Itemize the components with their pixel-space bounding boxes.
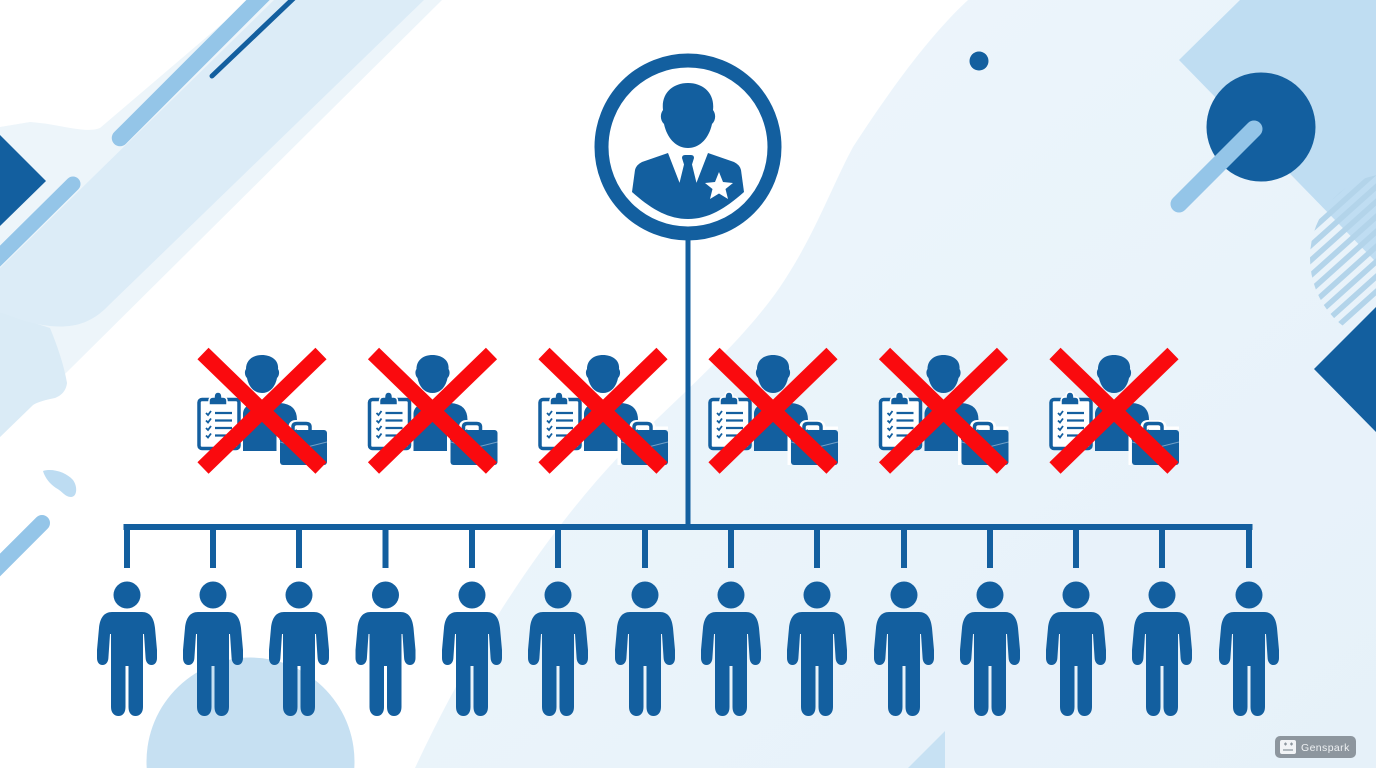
employee 9 bbox=[787, 582, 847, 716]
employee 2 bbox=[183, 582, 243, 716]
connector: horizontal bracket with drops bbox=[124, 524, 1252, 568]
employee 4 bbox=[356, 582, 416, 716]
decoration: lower soft blob left bbox=[0, 312, 67, 437]
decoration: bottom left circle bbox=[146, 658, 354, 768]
crossed-out manager 2 bbox=[370, 354, 498, 468]
decoration: striped circle bbox=[1310, 176, 1376, 326]
employee 12 bbox=[1046, 582, 1106, 716]
decoration: dark diamond right bbox=[1314, 307, 1376, 432]
decoration: bottom left stroke bbox=[0, 523, 42, 575]
decoration: bottom left small blob bbox=[43, 470, 76, 497]
leader star bbox=[705, 172, 733, 199]
watermark: Genspark bbox=[1275, 736, 1356, 758]
employee 5 bbox=[442, 582, 502, 716]
decoration: strokes top left bbox=[0, 0, 296, 268]
background blob: right bbox=[415, 0, 1376, 768]
decoration: dot bbox=[970, 52, 988, 70]
decoration: small triangle bottom bbox=[908, 731, 945, 768]
icon: leader in circle bbox=[602, 60, 774, 234]
employee 7 bbox=[615, 582, 675, 716]
employee 1 bbox=[97, 582, 157, 716]
leader shirt bbox=[668, 153, 708, 184]
leader tie bbox=[679, 155, 697, 185]
employee 11 bbox=[960, 582, 1020, 716]
crossed-out manager 3 bbox=[540, 354, 668, 468]
connector: vertical line from leader bbox=[686, 238, 690, 526]
crossed-out manager 5 bbox=[880, 354, 1008, 468]
watermark label: Genspark bbox=[1301, 742, 1350, 754]
crossed-out manager 4 bbox=[710, 354, 838, 468]
decoration: dark circle top right bbox=[1206, 72, 1316, 182]
leader head bbox=[661, 83, 715, 148]
decoration: dark diamond left bbox=[0, 135, 46, 226]
decoration: pale band top left bbox=[0, 0, 442, 437]
employee 3 bbox=[269, 582, 329, 716]
employee 13 bbox=[1132, 582, 1192, 716]
watermark icon bbox=[1280, 740, 1296, 754]
employee 8 bbox=[701, 582, 761, 716]
decoration: pale square top right bbox=[1179, 0, 1376, 262]
leader suit bbox=[632, 153, 744, 219]
crossed-out manager 6 bbox=[1051, 354, 1179, 468]
crossed-out manager 1 bbox=[199, 354, 327, 468]
decoration: diagonal band left bbox=[0, 0, 424, 327]
employee 10 bbox=[874, 582, 934, 716]
employee 6 bbox=[528, 582, 588, 716]
employee 14 bbox=[1219, 582, 1279, 716]
decoration: light stroke over circle bbox=[1179, 129, 1254, 204]
